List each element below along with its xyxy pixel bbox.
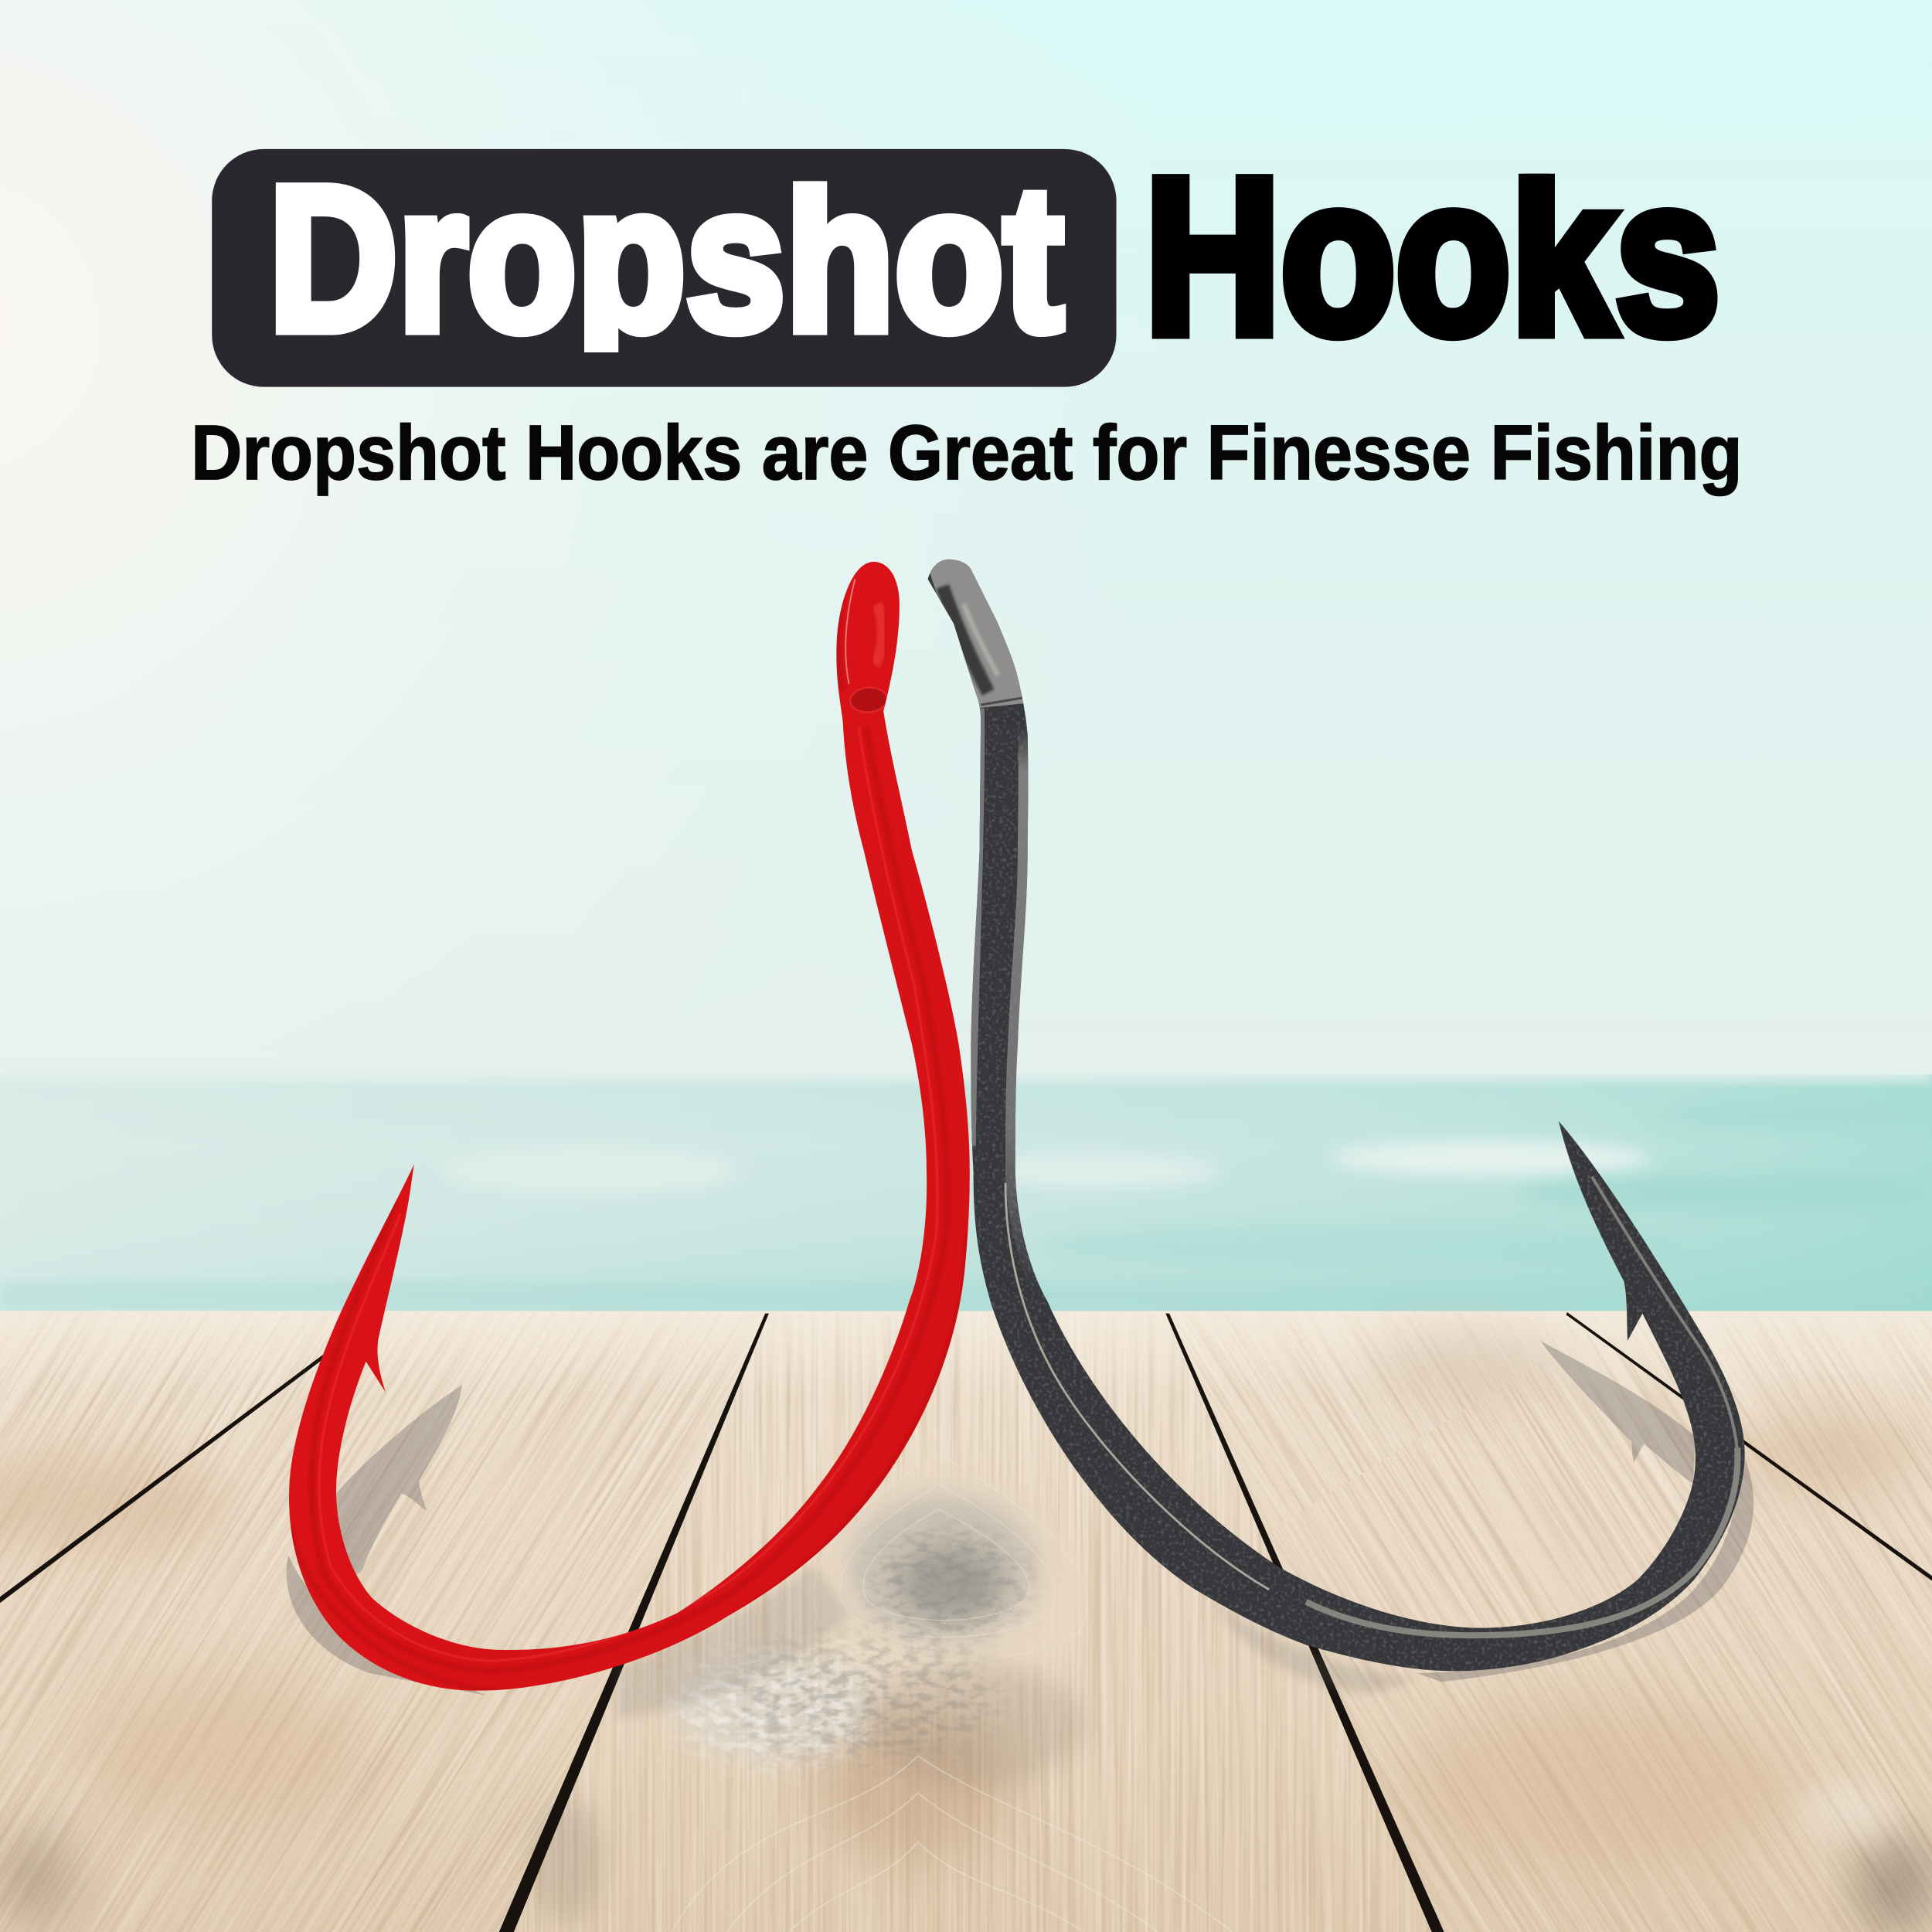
subtitle: Dropshot Hooks are Great for Finesse Fishing [191,410,1742,496]
background: wooden deck [0,1311,1932,1932]
shadow: red hook [287,1385,850,1719]
hook eye [838,579,888,713]
wood knot [672,1454,1232,1932]
title: Dropshot label: Dropshot [269,144,1063,375]
gray hook eye section [930,560,1023,708]
shadow: gray hook [1213,1341,1753,1694]
background: sea [0,1062,1932,1316]
plank gaps [0,1312,1932,1932]
hook: red dropshot hook [289,562,970,1691]
hook: gray dropshot hook [924,554,1750,1675]
wood patches [0,1333,1930,1930]
background: sky [0,0,1932,1084]
title pill [212,149,1117,387]
title: Hooks: Hooks [1145,131,1720,379]
